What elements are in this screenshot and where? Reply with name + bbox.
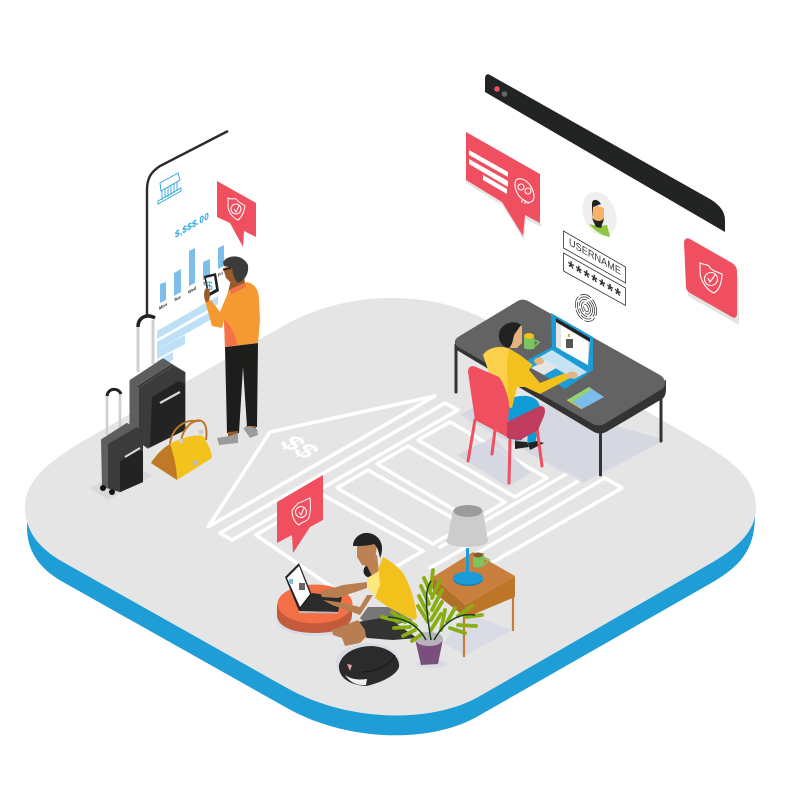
balance amount: $,$$$.00 <box>175 210 209 241</box>
lamp <box>446 505 488 586</box>
sleeping cat <box>336 643 400 686</box>
bar labels <box>159 270 223 311</box>
side table floor shadow <box>443 613 512 655</box>
bar labels: Wed <box>188 285 196 295</box>
hand <box>204 288 210 302</box>
dollar signs on floor: $$ <box>273 431 327 463</box>
jacket <box>205 282 260 347</box>
arms <box>320 582 367 598</box>
user avatar <box>576 187 623 241</box>
username field: USERNAME <box>569 237 621 278</box>
mug on side table <box>473 552 489 568</box>
red chair <box>468 366 545 483</box>
floor cushion <box>277 584 353 636</box>
red shield tag on floor <box>277 475 323 553</box>
head <box>510 326 522 348</box>
desk edge <box>455 340 666 434</box>
desk legs <box>456 345 661 475</box>
red shield tag on phone <box>217 181 256 247</box>
ankles and shoes <box>217 426 258 445</box>
head <box>223 266 236 283</box>
person with tablet <box>204 256 260 445</box>
hair bun <box>364 564 376 578</box>
trousers <box>225 343 258 433</box>
yellow bag <box>151 420 212 480</box>
bar labels: Tue <box>174 294 181 303</box>
malware speech bubble <box>466 132 541 240</box>
password field: ******* <box>568 256 621 307</box>
login form <box>564 231 626 307</box>
table floor shadow <box>460 392 665 483</box>
desk top <box>455 300 665 425</box>
neck <box>364 555 379 576</box>
icon: skull <box>515 179 534 204</box>
laptop on desk <box>524 313 593 389</box>
chair floor shadow <box>457 437 530 487</box>
right shield tag <box>684 238 739 325</box>
small suitcase <box>100 389 143 495</box>
large suitcase <box>131 316 185 448</box>
desk <box>455 300 666 475</box>
crossed legs <box>360 607 413 625</box>
side table <box>433 552 515 657</box>
jeans <box>508 396 541 445</box>
laptop on cushion <box>285 563 342 614</box>
floor plan of house <box>208 396 622 596</box>
small suitcase floor shadow <box>90 464 152 500</box>
person at desk <box>483 322 578 450</box>
person with tablet: $ <box>206 279 213 293</box>
potted plant <box>382 570 482 668</box>
bar labels: Thu <box>203 278 210 287</box>
tablet <box>204 273 219 297</box>
shirt <box>483 347 570 408</box>
platform base <box>25 298 756 735</box>
shoes <box>515 441 544 450</box>
woman on floor <box>320 533 417 646</box>
mug on desk <box>524 333 539 350</box>
text stripes <box>157 296 218 369</box>
hands <box>534 358 544 364</box>
icon: fingerprint <box>571 291 601 325</box>
phone screen <box>147 131 228 369</box>
icon: bank <box>158 173 181 204</box>
head <box>357 543 377 566</box>
bar chart <box>160 245 224 303</box>
pot shadow <box>416 660 448 668</box>
neck <box>228 276 246 292</box>
yellow shirt <box>375 557 417 620</box>
bar labels: Mon <box>159 301 167 311</box>
leaves <box>382 570 482 641</box>
bar labels: Fri <box>218 270 223 278</box>
notebook <box>567 387 604 409</box>
browser top bar <box>485 74 725 232</box>
